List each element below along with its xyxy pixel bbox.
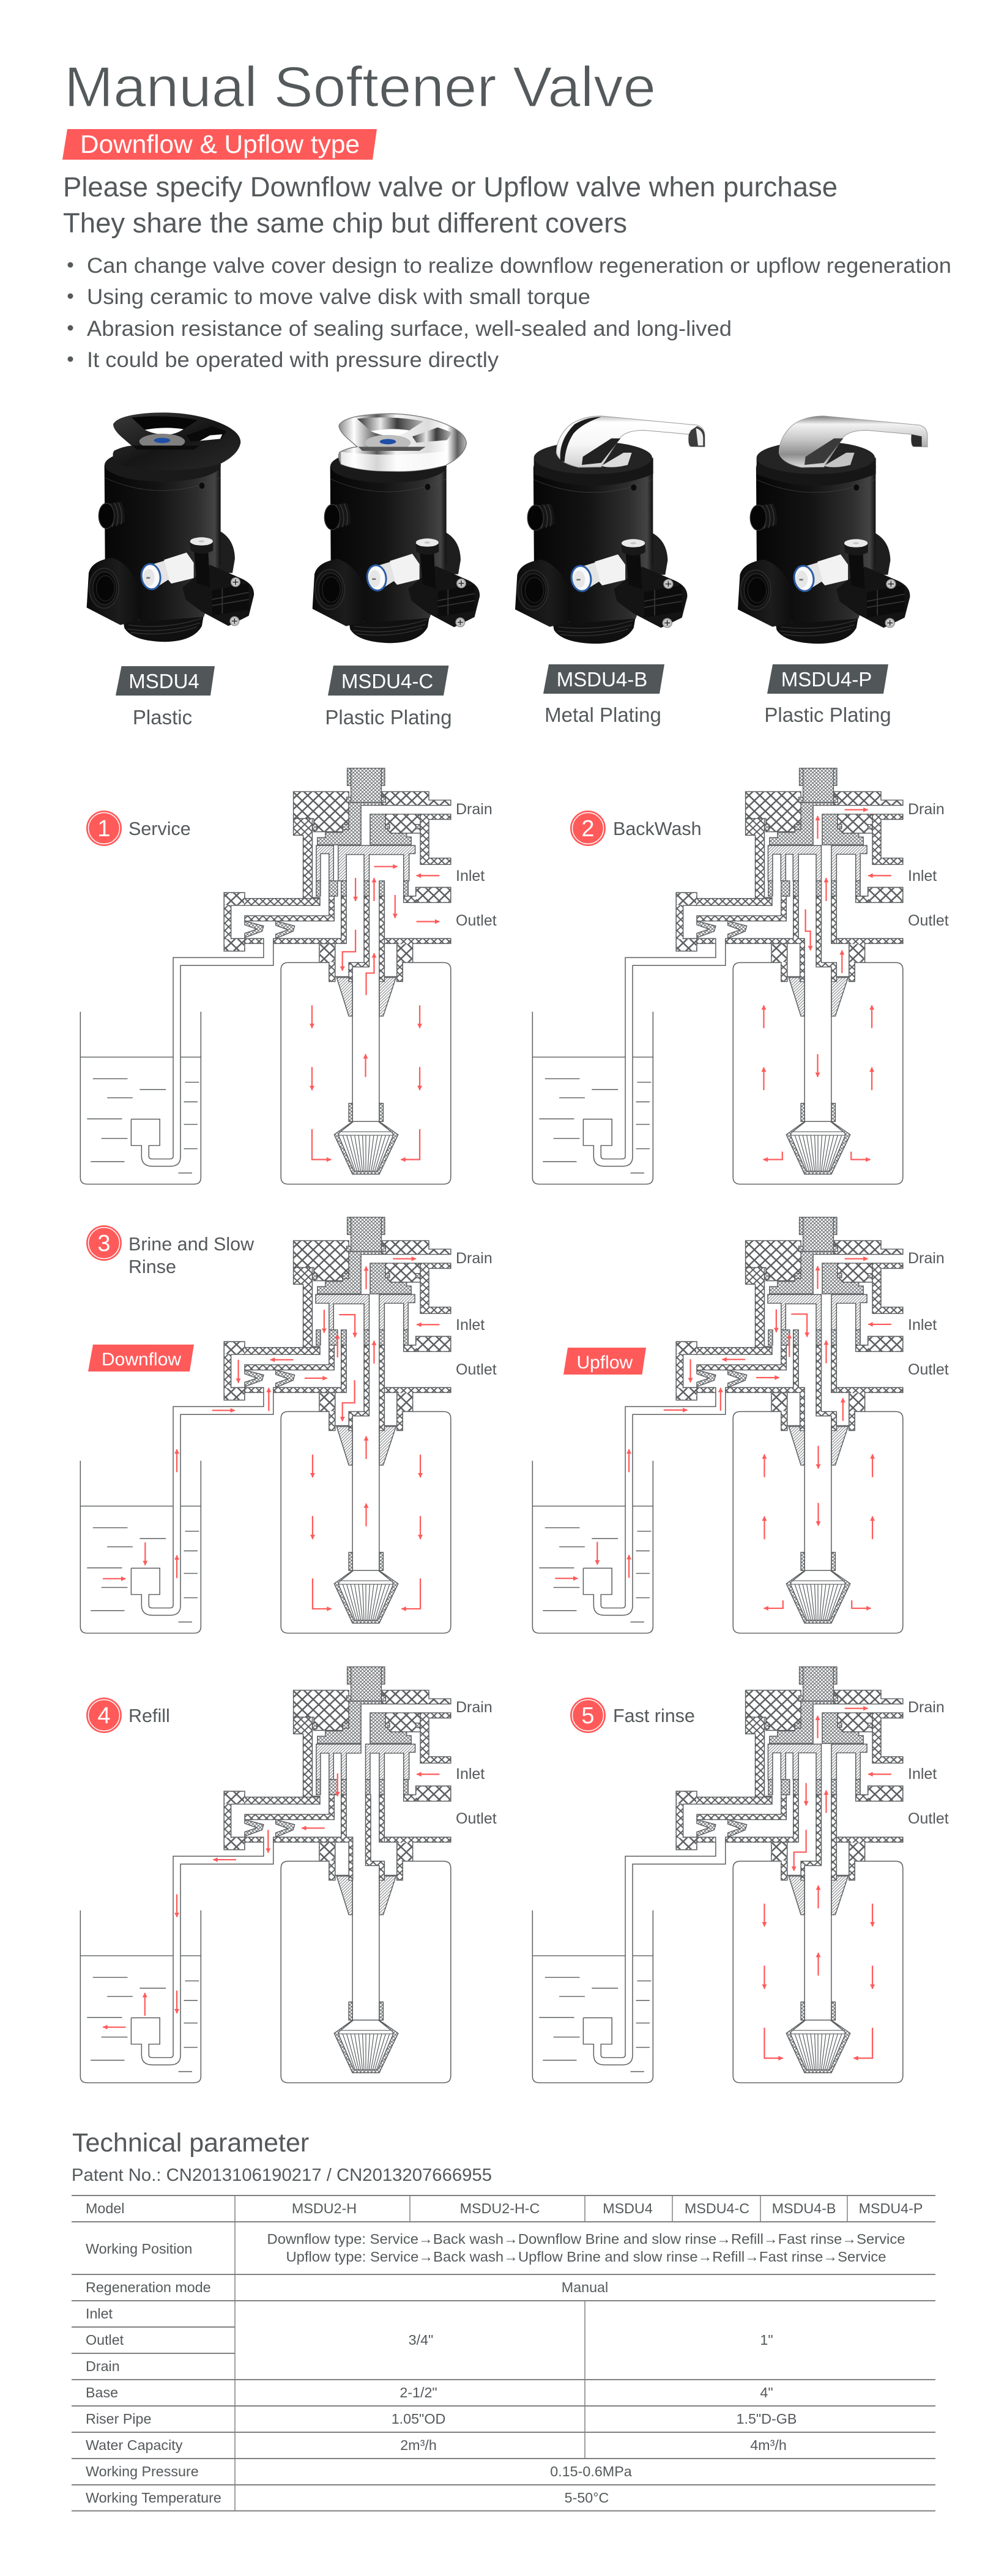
table: technical parameters: Upflow type: Service→Back wash→Upflow Brine and slow rinse→Refill→Fast rinse→Service [286,2249,886,2265]
port labels: Drain [456,1250,492,1267]
valve section, tank and brine tank [80,768,451,1184]
step name: Service [128,818,191,839]
flow arrows [312,867,439,1160]
intro text: They share the same chip but different covers [63,207,627,239]
port labels [456,801,497,929]
table: technical parameters: Working Temperature [86,2490,221,2506]
stage 5: Fast rinse [532,1667,949,2083]
upflow tag: Upflow [576,1353,633,1373]
valve photo: black wheel handle [87,412,254,642]
stage 3: Brine and Slow Rinse, upflow [532,1217,949,1633]
table: technical parameters: MSDU4 [603,2200,653,2216]
feature bullets: Using ceramic to move valve disk with small torque [87,285,590,309]
step badge [86,1698,122,1733]
port labels [456,1250,497,1378]
step badge [86,1225,122,1261]
product: MSDU4-P [738,416,927,726]
step badge: 3 [97,1231,111,1256]
finish: Plastic [133,706,192,729]
finish: Plastic Plating [764,703,891,726]
model tag: MSDU4-C [341,670,433,692]
finish: Metal Plating [544,703,661,726]
table: technical parameters: Working Position [86,2241,192,2257]
table: technical parameters: 0.15-0.6MPa [550,2463,632,2479]
table: technical parameters: Model [86,2200,124,2216]
port labels: Inlet [908,867,937,885]
step badge [86,811,122,846]
table: technical parameters: Riser Pipe [86,2411,151,2427]
table: technical parameters: Inlet [86,2306,113,2322]
table: technical parameters: MSDU4-C [685,2200,749,2216]
table: technical parameters: 1.05"OD [392,2411,445,2427]
model tag [328,666,449,696]
port labels [908,1250,949,1378]
port labels: Outlet [456,1810,497,1827]
stage 2: BackWash [532,768,949,1184]
model tag: MSDU4-B [557,668,647,691]
valve section, tank and brine tank [532,1217,903,1633]
port labels: Drain [908,801,945,818]
step badge: 1 [97,816,111,842]
feature bullets: Can change valve cover design to realize downflow regeneration or upflow regeneration [87,254,951,278]
stage 3: Brine and Slow Rinse, downflow [80,1217,497,1633]
table: technical parameters: 5-50°C [565,2490,609,2506]
port labels: Outlet [908,1810,949,1827]
step name: Refill [128,1706,170,1726]
table: technical parameters: 1" [760,2332,773,2348]
stage 1: Service [80,768,497,1184]
step badge: 5 [581,1703,595,1729]
port labels [908,801,949,929]
table: technical parameters: 3/4" [409,2332,433,2348]
step badge: 2 [581,816,595,842]
port labels: Drain [908,1250,945,1267]
flow arrows [555,1259,891,1608]
product: MSDU4-B [515,416,705,726]
flow arrows [764,1709,891,2058]
table: technical parameters: Downflow type: Service→Back wash→Downflow Brine and slow rinse→Refill→Fast rinse→Service [267,2231,905,2247]
port labels: Drain [908,1699,945,1716]
table: technical parameters: Working Pressure [86,2463,199,2479]
step name: Fast rinse [613,1706,695,1726]
feature bullets [67,254,951,372]
feature bullets: Abrasion resistance of sealing surface, well-sealed and long-lived [87,317,732,341]
step name: Brine and Slow [128,1234,255,1255]
table: technical parameters: MSDU4-P [859,2200,923,2216]
step name: Rinse [128,1256,176,1277]
table: technical parameters: 4m³/h [750,2437,787,2453]
port labels: Outlet [908,912,949,929]
port labels: Drain [456,1699,492,1716]
port labels: Inlet [456,867,485,885]
table: technical parameters: MSDU2-H [292,2200,357,2216]
valve photo: silver lever [738,416,927,644]
port labels: Drain [456,801,492,818]
model tag [543,664,664,694]
port labels [908,1699,949,1827]
port labels: Outlet [456,1361,497,1378]
intro text [63,171,838,239]
valve photo: chrome wheel handle [313,414,480,643]
table: technical parameters: Base [86,2385,118,2400]
table: technical parameters [72,2196,935,2511]
product: MSDU4 [87,412,254,729]
port labels: Inlet [456,1316,485,1334]
title: Manual Softener Valve [64,55,656,119]
step badge [570,1698,606,1733]
valve section, tank and brine tank [80,1667,451,2083]
flow arrows [763,810,891,1160]
table: technical parameters: Manual [562,2279,608,2295]
port labels: Outlet [908,1361,949,1378]
downflow tag [88,1345,194,1372]
table: technical parameters: 4" [760,2385,773,2400]
finish: Plastic Plating [325,706,452,729]
table: technical parameters: 1.5"D-GB [737,2411,797,2427]
valve photo: white-chrome lever [515,416,705,644]
section heading: Technical parameter [72,2128,309,2158]
step badge [570,811,606,846]
table: technical parameters: MSDU2-H-C [460,2200,540,2216]
step badge: 4 [97,1703,111,1729]
port labels [456,1699,497,1827]
table: technical parameters: 2m³/h [400,2437,437,2453]
type badge: Downflow & Upflow type [80,130,360,158]
table: technical parameters: MSDU4-B [772,2200,836,2216]
table: technical parameters: Regeneration mode [86,2279,211,2295]
port labels: Inlet [908,1765,937,1783]
product: MSDU4-C [313,414,480,729]
port labels: Outlet [456,912,497,929]
valve section, tank and brine tank [532,768,903,1184]
intro text: Please specify Downflow valve or Upflow valve when purchase [63,171,838,202]
port labels: Inlet [456,1765,485,1783]
model tag: MSDU4 [128,670,199,692]
feature bullets: It could be operated with pressure directly [87,348,499,372]
flow arrows [103,1259,439,1609]
table: technical parameters: 2-1/2" [399,2385,437,2400]
model tag [116,666,215,696]
step name [128,1234,255,1277]
table: technical parameters: Drain [86,2358,120,2374]
flow arrows [103,1773,439,2027]
valve section, tank and brine tank [80,1217,451,1633]
downflow tag: Downflow [102,1349,181,1370]
table: technical parameters: Water Capacity [86,2437,183,2453]
port labels: Inlet [908,1316,937,1334]
model tag: MSDU4-P [781,668,872,691]
step name: BackWash [613,818,702,839]
patent numbers: Patent No.: CN2013106190217 / CN2013207666955 [72,2166,492,2185]
upflow tag [563,1348,646,1375]
model tag [767,664,888,694]
valve section, tank and brine tank [532,1667,903,2083]
stage 4: Refill [80,1667,497,2083]
table: technical parameters: Outlet [86,2332,124,2348]
